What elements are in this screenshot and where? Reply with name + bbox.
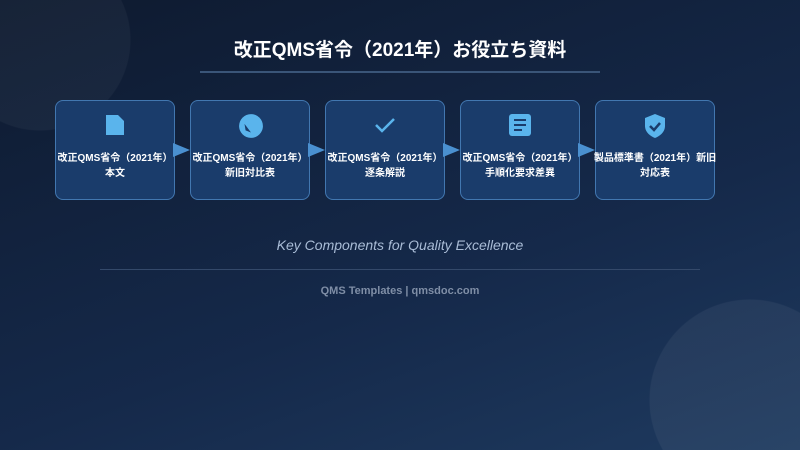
card 5	[595, 100, 715, 200]
card 1: 本文	[105, 168, 125, 179]
card 1: 改正QMS省令（2021年）	[57, 153, 173, 164]
card 2: 新旧対比表	[225, 168, 275, 179]
arrow 2	[308, 143, 325, 157]
card 3: 逐条解説	[365, 168, 405, 179]
arrow 4	[578, 143, 595, 157]
card 5: 対応表	[640, 168, 670, 179]
card 3	[325, 100, 445, 200]
card 1	[55, 100, 175, 200]
arrow 1	[173, 143, 190, 157]
card 4: 改正QMS省令（2021年）	[462, 153, 578, 164]
icon: document	[106, 115, 124, 135]
card 4	[460, 100, 580, 200]
footer: QMS Templates | qmsdoc.com	[321, 285, 479, 297]
icon: list	[509, 114, 531, 136]
icon: shield	[645, 114, 665, 138]
card 2: 改正QMS省令（2021年）	[192, 153, 308, 164]
subtitle: Key Components for Quality Excellence	[277, 237, 523, 253]
icon: check	[375, 118, 395, 133]
arrow 3	[443, 143, 460, 157]
card 4: 手順化要求差異	[485, 168, 555, 179]
card 2	[190, 100, 310, 200]
card 3: 改正QMS省令（2021年）	[327, 153, 443, 164]
icon: compare	[239, 114, 263, 138]
title: 改正QMS省令（2021年）お役立ち資料	[234, 40, 566, 61]
card 5: 製品標準書（2021年）新旧	[594, 153, 716, 164]
